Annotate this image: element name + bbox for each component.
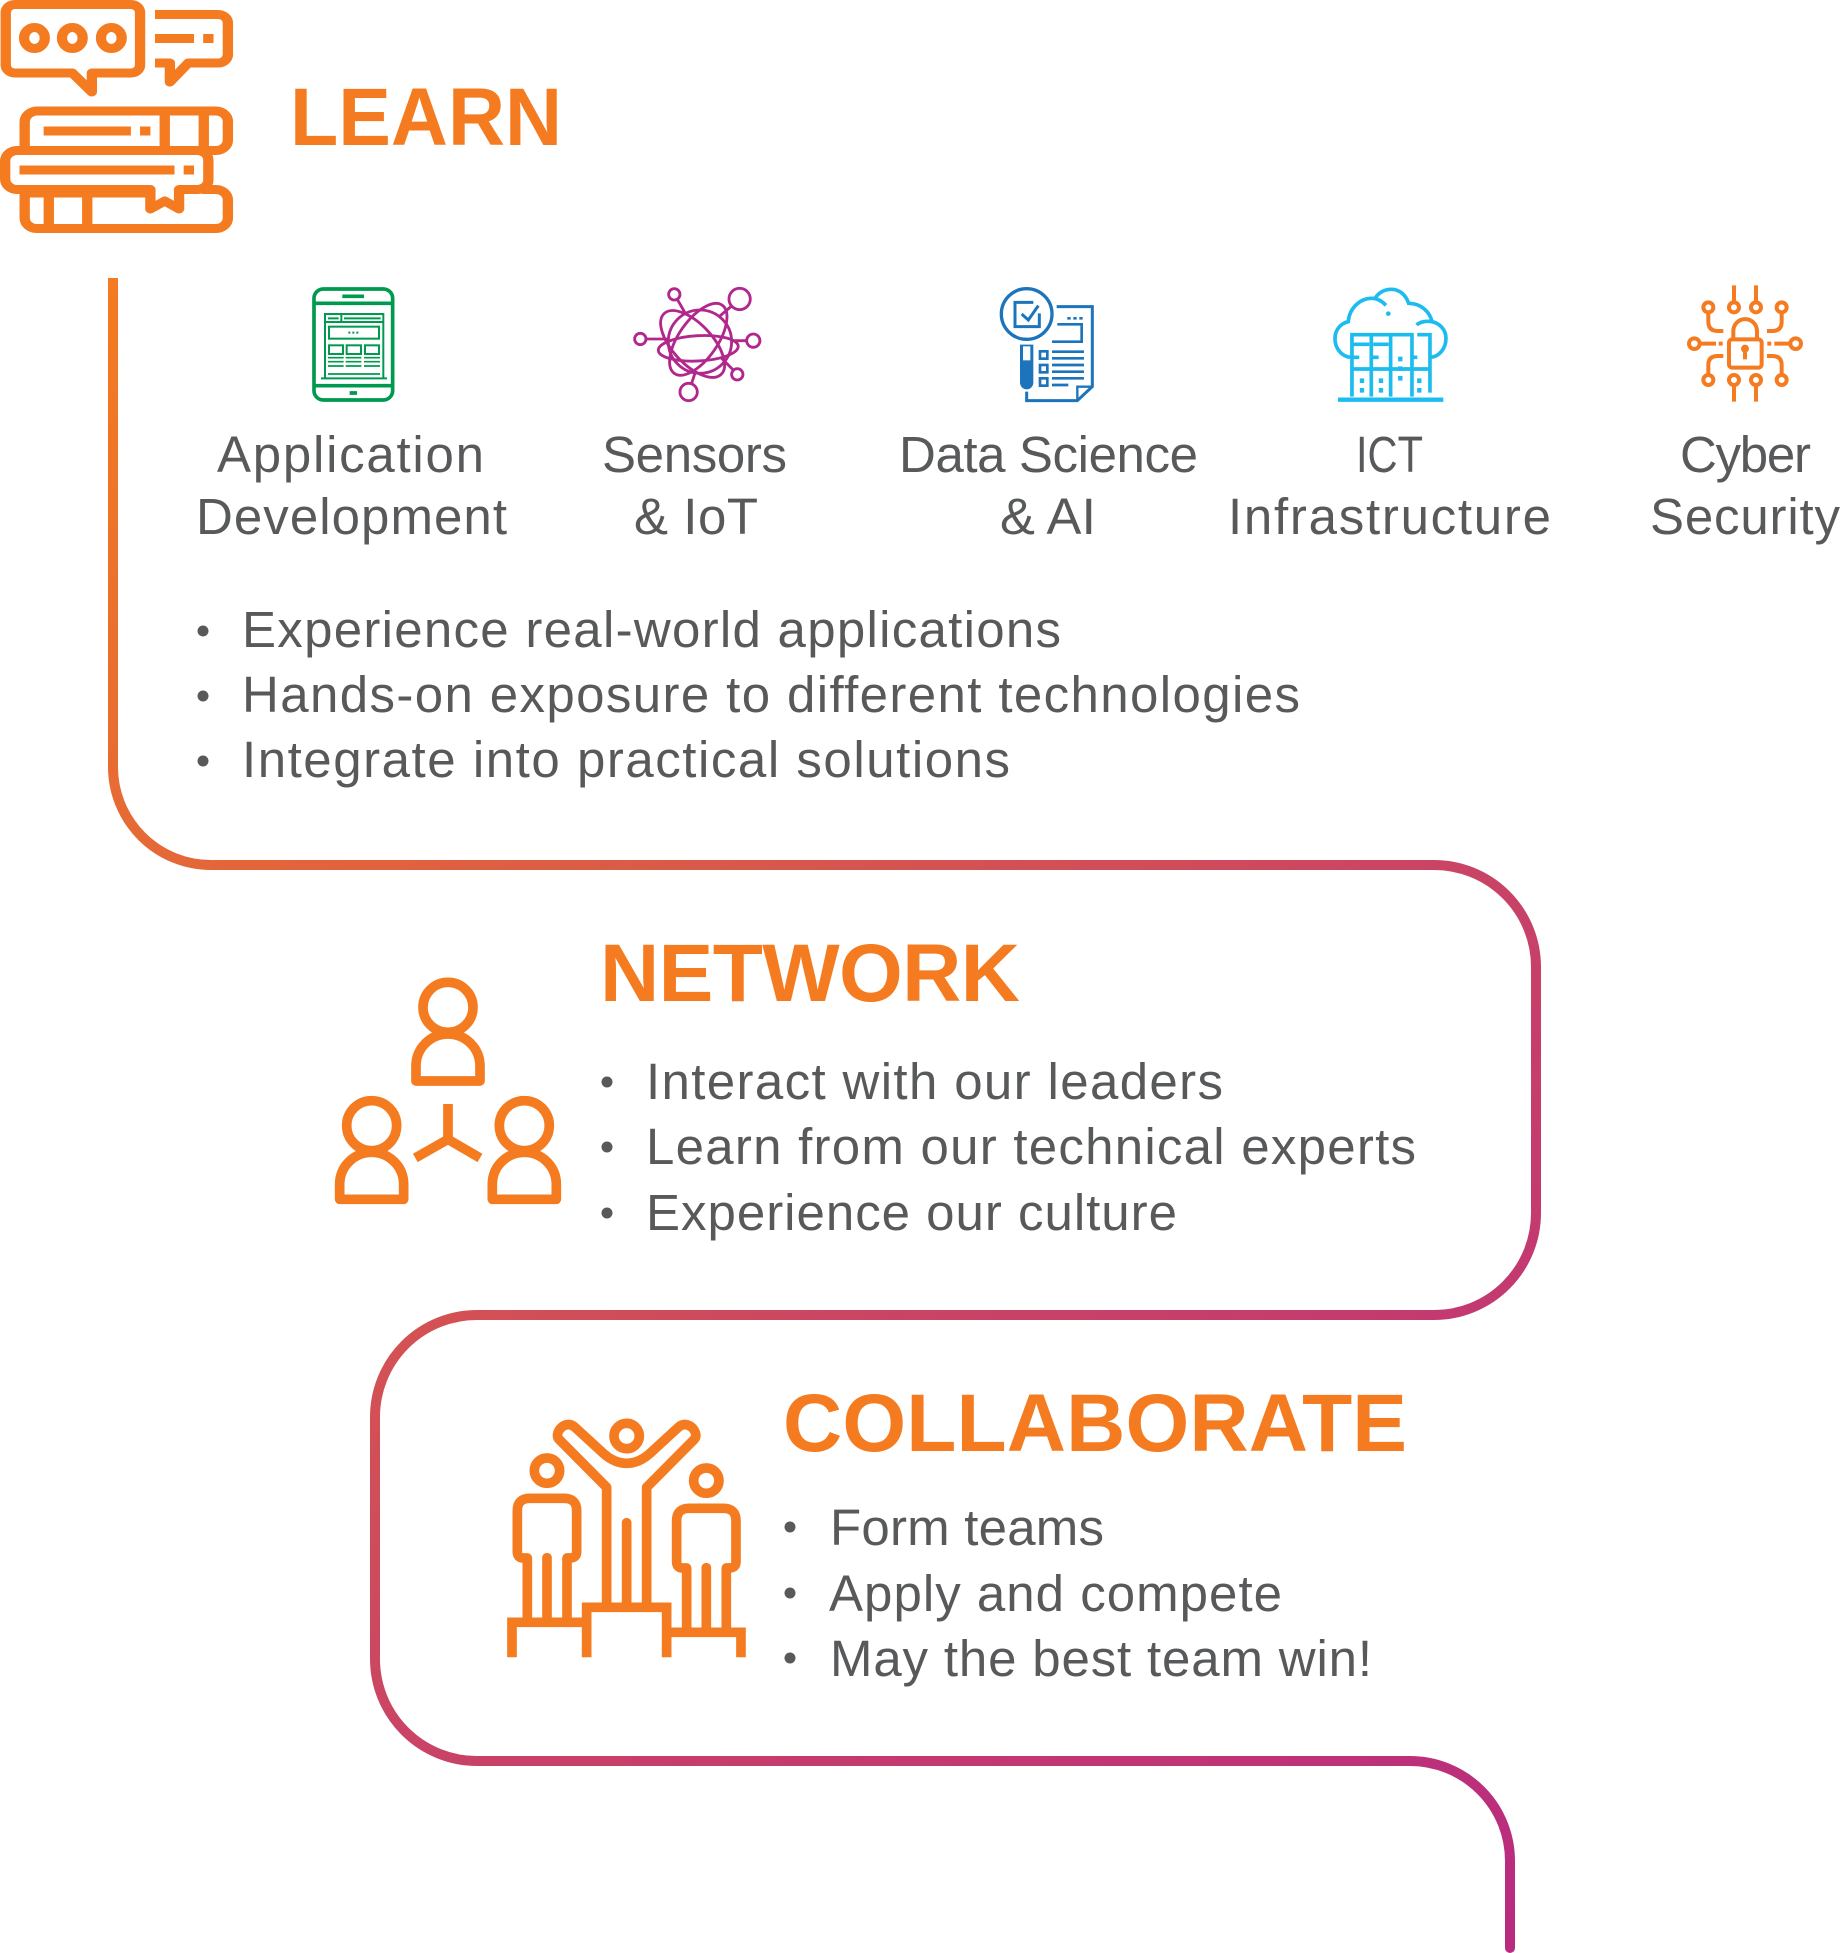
label: Sensors & IoT: & IoT <box>634 488 758 545</box>
label: Application Development: Development <box>196 488 507 545</box>
icon: sensors network globe <box>635 288 760 401</box>
bullet list: network <box>602 1053 1416 1241</box>
heading: COLLABORATE: COLLABORATE <box>783 1378 1407 1469</box>
bullet list: collaborate <box>784 1499 1372 1687</box>
label: Cyber Security <box>1650 426 1840 545</box>
label: Data Science & AI: & AI <box>1000 488 1096 545</box>
bullet list: network: Interact with our leaders <box>646 1053 1223 1110</box>
label: Data Science & AI <box>899 426 1198 545</box>
label: ICT Infrastructure: ICT <box>1356 426 1423 483</box>
bullet list: collaborate: Form teams <box>830 1499 1104 1556</box>
icon: three connected people <box>340 982 556 1199</box>
bullet list: learn: Experience real-world applications <box>242 601 1061 658</box>
label: Sensors & IoT: Sensors <box>602 426 787 483</box>
winding path connector <box>113 278 1536 1953</box>
bullet list: network: Learn from our technical experts <box>646 1118 1416 1175</box>
bullet list: learn: Hands-on exposure to different technologies <box>242 666 1300 723</box>
icon: people on a winners podium <box>512 1423 741 1657</box>
label: Cyber Security: Cyber <box>1680 426 1811 483</box>
label: Sensors & IoT <box>602 426 787 545</box>
bullet list: collaborate: Apply and compete <box>829 1565 1282 1622</box>
label: Cyber Security: Security <box>1650 488 1840 545</box>
bullet list: learn <box>198 601 1300 788</box>
icon: cyber security lock <box>1689 285 1801 402</box>
label: Data Science & AI: Data Science <box>899 426 1198 483</box>
icon: cloud infrastructure <box>1335 289 1446 400</box>
bullet list: collaborate: May the best team win! <box>830 1630 1372 1687</box>
icon: data science report with magnifier <box>1001 289 1092 401</box>
heading: LEARN: LEARN <box>290 72 562 163</box>
icon: tablet application <box>314 289 393 400</box>
heading: NETWORK: NETWORK <box>600 928 1020 1019</box>
label: Application Development <box>196 426 507 545</box>
label: ICT Infrastructure: Infrastructure <box>1228 488 1551 545</box>
label: Application Development: Application <box>217 426 484 483</box>
bullet list: learn: Integrate into practical solutions <box>242 731 1010 788</box>
icon: speech bubbles and books <box>5 4 228 228</box>
label: ICT Infrastructure <box>1228 426 1551 545</box>
bullet list: network: Experience our culture <box>646 1184 1177 1241</box>
